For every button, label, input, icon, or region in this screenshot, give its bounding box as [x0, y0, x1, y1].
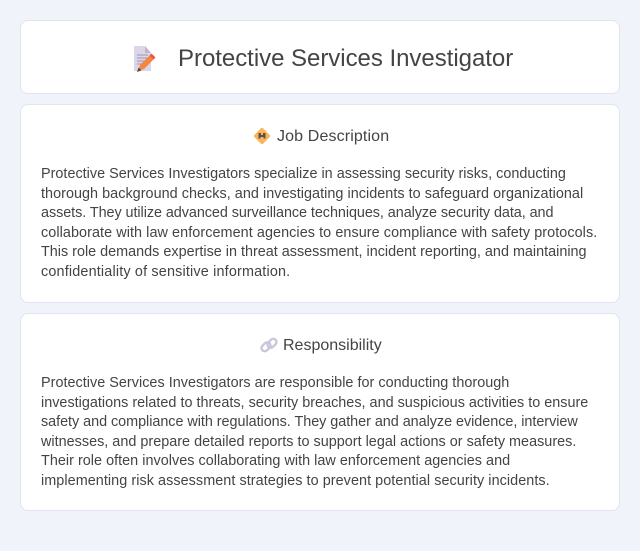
text: responsibility body: Their role often involves collaborating with law enforcement agencies and	[41, 453, 510, 469]
text: job description body: This role demands expertise in threat assessment, incident reporting, and maintaining	[41, 244, 587, 260]
text: job description body: Protective Services Investigators specialize in assessing security risks, conducting	[41, 166, 566, 182]
panel: responsibility	[20, 313, 620, 511]
heading: responsibility: Responsibility	[283, 337, 382, 354]
text: job description body: thorough background checks, and investigating incidents to safeguard organizational	[41, 186, 583, 202]
icon: document with pencil	[134, 46, 156, 72]
text: job description body: assets. They utilize advanced surveillance techniques, analyze security data, and	[41, 205, 553, 221]
text: responsibility body: Protective Services Investigators are responsible for conducting thorough	[41, 375, 509, 391]
text: job description body: confidentiality of sensitive information.	[41, 264, 290, 280]
text: job description body: collaborate with law enforcement agencies to ensure compliance with safety protocols.	[41, 225, 597, 241]
text: responsibility body: safety and compliance with regulations. They gather and analyze evidence, interview	[41, 414, 578, 430]
text: responsibility body: implementing risk assessment strategies to prevent potential security incidents.	[41, 473, 550, 489]
text: responsibility body: investigations related to threats, security breaches, and suspicious activities to ensure	[41, 395, 588, 411]
heading: job description: Job Description	[277, 128, 389, 145]
icon: chain link	[260, 338, 278, 352]
icon: warning diamond	[254, 128, 270, 144]
title: Protective Services Investigator	[178, 45, 513, 72]
text: responsibility body	[41, 375, 588, 489]
text: job description body	[41, 166, 597, 280]
panel: title card	[20, 20, 620, 94]
panel: job description	[20, 104, 620, 303]
text: responsibility body: witnesses, and prepare detailed reports to support legal actions or safety measures.	[41, 434, 576, 450]
